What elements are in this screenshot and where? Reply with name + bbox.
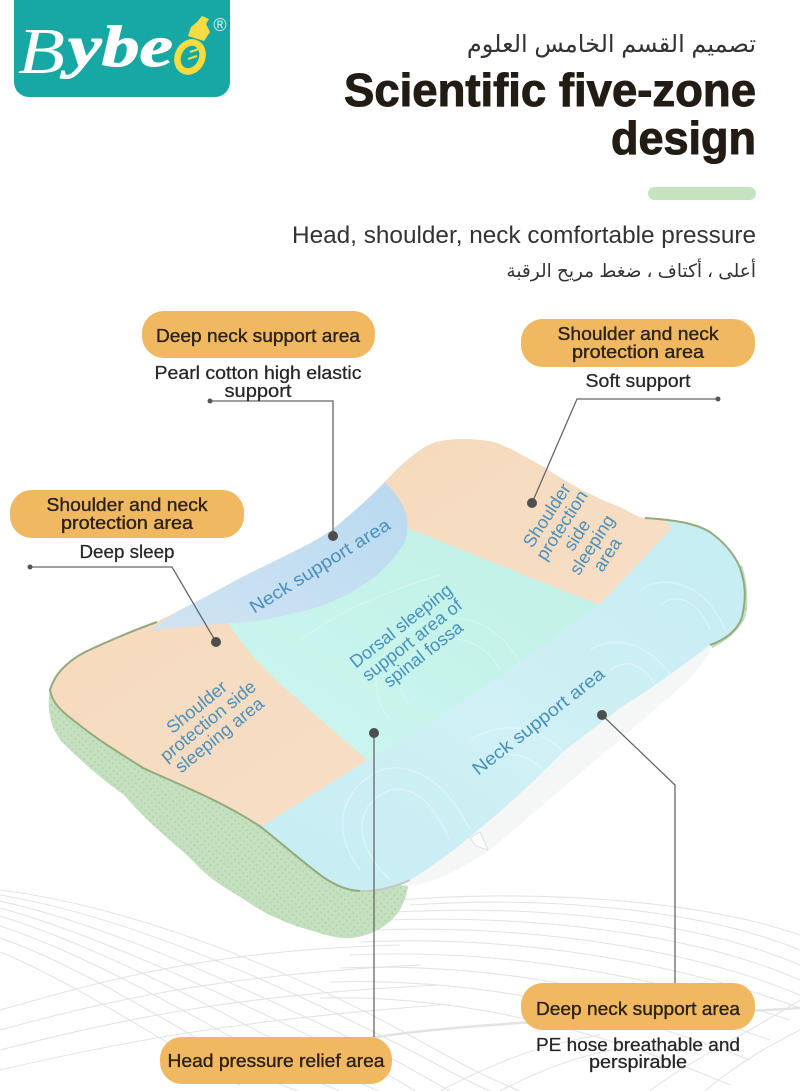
zone labels (145, 477, 637, 780)
callout: deep neck bottom: PE hose breathable and (536, 1035, 740, 1055)
label: right shoulder: Shoulder (519, 480, 575, 551)
callout: shoulder left: protection area (61, 513, 194, 533)
callout: head (160, 1037, 392, 1084)
icon: baby bottle (173, 16, 210, 76)
peach right zone (382, 439, 672, 605)
callout: shoulder right (521, 319, 755, 391)
callout: head: Head pressure relief area (168, 1051, 386, 1071)
label: top neck support: Neck support area (246, 514, 395, 617)
logo (14, 0, 230, 97)
label: left shoulder: sleeping area (171, 693, 268, 777)
label: right shoulder: protection (532, 487, 592, 564)
logo: ® (213, 15, 227, 35)
logo: B (18, 15, 65, 88)
pillow edge bottom (360, 880, 410, 891)
title: design (611, 112, 756, 164)
label: dorsal (346, 580, 478, 700)
subtitle: Head, shoulder, neck comfortable pressure (292, 222, 756, 249)
arabic heading: تصميم القسم الخامس العلوم (467, 31, 756, 58)
leader line: shoulder right (527, 396, 720, 508)
leader line: head (369, 728, 379, 1037)
callout: shoulder right: Soft support (586, 371, 690, 391)
arabic subtitle: أعلى ، أكتاف ، ضغط مريح الرقبة (506, 260, 756, 281)
blue neck zone (150, 480, 408, 630)
callout: shoulder left: Deep sleep (80, 542, 174, 562)
peach left zone (30, 600, 367, 827)
pillow top surface (51, 439, 744, 890)
callout: deep neck top: Pearl cotton high elastic (154, 363, 362, 383)
label: dorsal: Dorsal sleeping (346, 580, 456, 672)
title (344, 64, 756, 164)
logo: ybe (60, 14, 173, 79)
label: right shoulder: sleeping (565, 511, 619, 578)
callout: deep neck top (142, 311, 375, 401)
callout: deep neck bottom (521, 983, 755, 1072)
label: left shoulder: Shoulder (162, 677, 231, 737)
zipper pull (470, 832, 488, 850)
label: left shoulder (145, 662, 271, 780)
label: right shoulder: area (589, 533, 626, 575)
callout: deep neck top: support (224, 381, 292, 401)
neck strip (157, 439, 744, 890)
callout: deep neck top: Deep neck support area (156, 326, 361, 346)
pillow right mesh side (700, 565, 747, 648)
label: dorsal: spinal fossa (379, 616, 467, 691)
mint zone (264, 528, 598, 723)
callout: shoulder right: protection area (572, 342, 705, 362)
pillow edge left (50, 622, 360, 891)
title: Scientific five-zone (344, 64, 756, 116)
leader line: lower neck (597, 710, 675, 983)
callout: shoulder right: Shoulder and neck (558, 324, 720, 344)
label: right shoulder (517, 477, 637, 593)
label: dorsal: support area of (358, 594, 467, 685)
callout: deep neck bottom: Deep neck support area (536, 999, 741, 1019)
pillow edge right (645, 518, 745, 645)
leader line: shoulder left (28, 564, 221, 647)
callout: deep neck bottom: perspirable (589, 1052, 687, 1072)
label: right shoulder: side (560, 516, 594, 554)
pillow white underside (380, 645, 712, 886)
pillow mesh side (49, 690, 408, 938)
label: lower neck support: Neck support area (468, 663, 609, 779)
callout: shoulder left (10, 490, 244, 562)
label: left shoulder: protection side (156, 676, 260, 766)
callout: shoulder left: Shoulder and neck (46, 495, 209, 515)
leader line: deep neck top (208, 398, 338, 541)
green accent bar (648, 187, 756, 200)
pillow (48, 439, 748, 938)
